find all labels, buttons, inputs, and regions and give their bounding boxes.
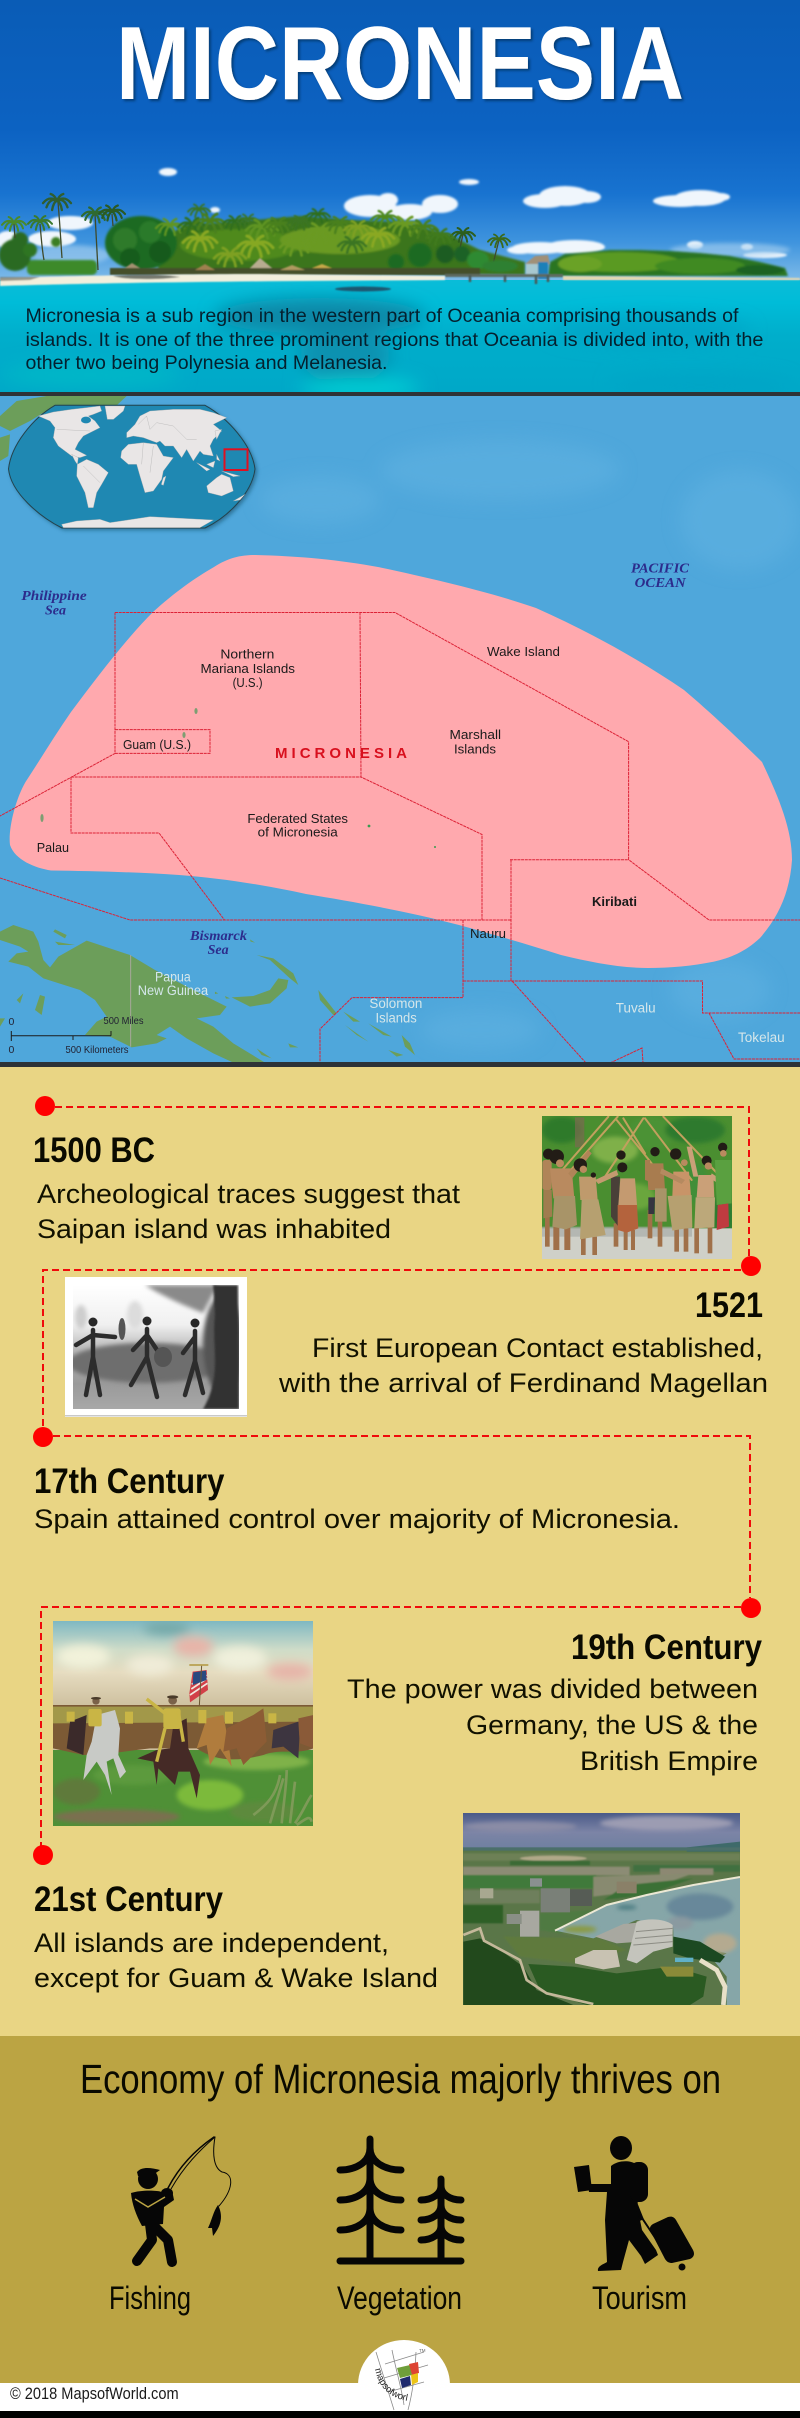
- intro text: [26, 305, 764, 374]
- sea labels: Philippine: [21, 589, 87, 604]
- beach: [0, 274, 800, 292]
- map labels: Palau: [37, 840, 69, 855]
- intro text: Micronesia is a sub region in the western part of Oceania comprising thousands of: [26, 305, 739, 327]
- event: 21st Century: All islands are independent,: [34, 1928, 389, 1958]
- logo: TM: [419, 2348, 426, 2353]
- sea labels: Bismarck: [189, 929, 247, 944]
- map labels: Wake Island: [487, 644, 560, 659]
- event: 17th Century: [34, 1462, 680, 1534]
- map labels: Federated States: [247, 811, 348, 826]
- map labels: Islands: [454, 741, 496, 756]
- left vegetation: [0, 216, 525, 275]
- panel: economy: [0, 2036, 800, 2383]
- event: 1500 BC: Saipan island was inhabited: [37, 1214, 391, 1244]
- label: tourism: Tourism: [592, 2280, 687, 2316]
- icon: trees: [340, 2139, 461, 2261]
- map labels: Guam (U.S.): [123, 737, 191, 752]
- event: 1500 BC: 1500 BC: [33, 1131, 155, 1170]
- event: 19th Century: British Empire: [580, 1746, 758, 1776]
- footer bar: [0, 2384, 800, 2411]
- water: [0, 280, 800, 392]
- scale bar: 500 Kilometers: [66, 1044, 128, 1056]
- panel: timeline: [0, 1067, 800, 2036]
- event: 19th Century: Germany, the US & the: [466, 1710, 758, 1740]
- map labels: Mariana Islands: [200, 661, 296, 676]
- image: engraving of warriors: [65, 1277, 247, 1417]
- divider bar: [0, 1062, 800, 1067]
- image: cavalry charge painting: [53, 1621, 313, 1826]
- event: 1521: [278, 1286, 768, 1398]
- event: 19th Century: [347, 1628, 762, 1776]
- event: 17th Century: 17th Century: [34, 1462, 225, 1501]
- sea labels: OCEAN: [635, 576, 687, 591]
- icon: fishing: [131, 2137, 231, 2262]
- bottom bar: [0, 2411, 800, 2418]
- scale bar: 500 Miles: [104, 1015, 144, 1027]
- island specks: [40, 708, 436, 848]
- copyright: © 2018 MapsofWorld.com: [10, 2384, 179, 2403]
- Micronesia highlight region: [10, 555, 792, 968]
- land: Japan coast: [0, 396, 127, 461]
- event: 19th Century: The power was divided between: [347, 1674, 758, 1704]
- scale bar: 0: [8, 1044, 14, 1056]
- title: MICRONESIA: [116, 6, 684, 122]
- land: Papua New Guinea: [0, 925, 415, 1063]
- sea labels: Sea: [208, 943, 229, 958]
- intro text: islands. It is one of the three prominent regions that Oceania is divided into, with the: [26, 329, 764, 351]
- neighbouring labels: Solomon: [369, 996, 422, 1011]
- flag: [189, 1665, 208, 1706]
- canopy palms: [156, 204, 454, 266]
- icon: tourist: [574, 2136, 694, 2271]
- neighbouring labels: [138, 970, 785, 1045]
- map labels: Marshall: [450, 727, 501, 742]
- neighbouring labels: Tokelau: [738, 1030, 785, 1045]
- sea labels: [21, 562, 690, 958]
- event: 1521: 1521: [695, 1286, 763, 1325]
- panel: header photo: [0, 0, 800, 398]
- sea labels: PACIFIC: [631, 562, 690, 577]
- map labels: Northern: [220, 646, 274, 662]
- event: 1521: First European Contact established,: [312, 1333, 763, 1363]
- event: 21st Century: [34, 1880, 438, 1993]
- map labels: (U.S.): [233, 675, 263, 690]
- neighbouring labels: Papua: [155, 970, 191, 984]
- event: 21st Century: except for Guam & Wake Island: [34, 1963, 438, 1993]
- right island and lower trees: [388, 243, 788, 276]
- scale bar: 0: [8, 1016, 14, 1028]
- divider bar: [0, 392, 800, 396]
- label: Micronesia region: MICRONESIA: [275, 745, 407, 762]
- neighbouring labels: Islands: [376, 1011, 417, 1026]
- photo: aerial view of Guam: [463, 1813, 740, 2005]
- neighbouring labels: Tuvalu: [616, 1001, 656, 1016]
- clouds: [0, 168, 787, 258]
- territorial boundaries: [0, 612, 800, 1063]
- panel: map: [0, 396, 800, 1063]
- label: fishing: Fishing: [109, 2280, 191, 2316]
- sea labels: Sea: [45, 604, 66, 619]
- event: 1521: with the arrival of Ferdinand Magellan: [278, 1368, 768, 1398]
- neighbouring labels: New Guinea: [138, 983, 209, 998]
- photo: islanders dancing: [542, 1116, 732, 1259]
- logo: [358, 2340, 450, 2410]
- inset world map: [8, 405, 257, 530]
- map labels: Kiribati: [592, 894, 637, 909]
- map labels: Nauru: [470, 926, 506, 941]
- palm trunks and crowns: [14, 202, 499, 270]
- intro text: other two being Polynesia and Melanesia.: [26, 352, 388, 374]
- event: 21st Century: 21st Century: [34, 1880, 223, 1919]
- timeline path: [33, 1096, 761, 1865]
- event: 1500 BC: [33, 1131, 461, 1244]
- logo: mapsofworld.com: [375, 2368, 408, 2401]
- huts and pier: [110, 255, 563, 284]
- ocean texture: [260, 440, 800, 1050]
- map labels: of Micronesia: [258, 825, 339, 840]
- event: 17th Century: Spain attained control over majority of Micronesia.: [34, 1504, 680, 1534]
- label: vegetation: Vegetation: [337, 2280, 462, 2316]
- map labels: [37, 644, 637, 941]
- event: 1500 BC: Archeological traces suggest that: [37, 1179, 461, 1209]
- scale bar: [8, 1015, 144, 1056]
- foreground plant: [253, 1770, 312, 1825]
- event: 19th Century: 19th Century: [571, 1628, 762, 1667]
